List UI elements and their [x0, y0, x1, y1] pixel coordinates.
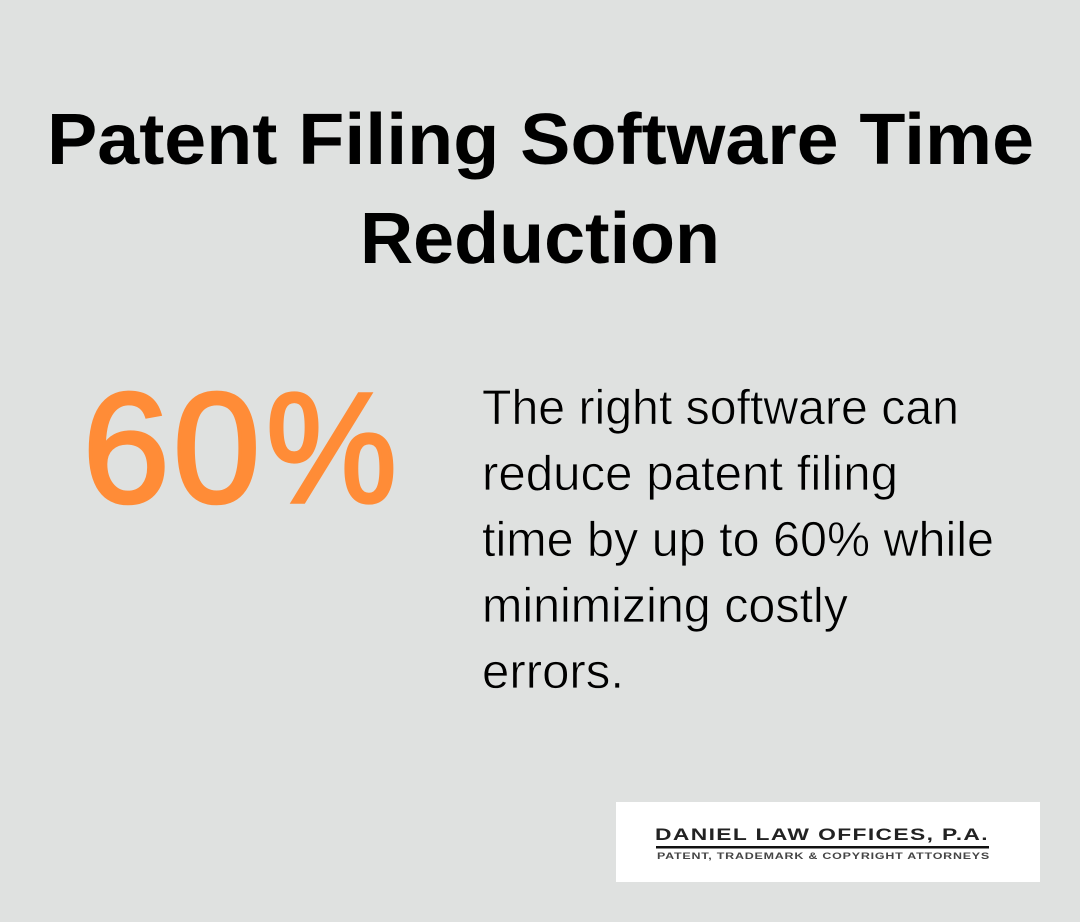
big statistic: 60%: %	[266, 361, 397, 536]
title	[47, 100, 1034, 279]
description text	[482, 380, 994, 699]
logo: Daniel Law Offices: DANIEL LAW OFFICES, P.A.	[655, 826, 989, 844]
description text: errors.	[482, 644, 624, 699]
description text: reduce patent filing	[482, 446, 898, 501]
big statistic: 60%: 6	[82, 361, 170, 536]
title: Patent Filing Software Time	[47, 100, 1034, 180]
description text: minimizing costly	[482, 578, 848, 633]
description text: time by up to 60% while	[482, 512, 994, 567]
logo: Daniel Law Offices	[616, 802, 1040, 882]
title: Reduction	[360, 199, 720, 279]
logo: Daniel Law Offices: PATENT, TRADEMARK & COPYRIGHT ATTORNEYS	[657, 851, 990, 862]
big statistic: 60%: 0	[173, 361, 260, 536]
description text: The right software can	[482, 380, 959, 435]
